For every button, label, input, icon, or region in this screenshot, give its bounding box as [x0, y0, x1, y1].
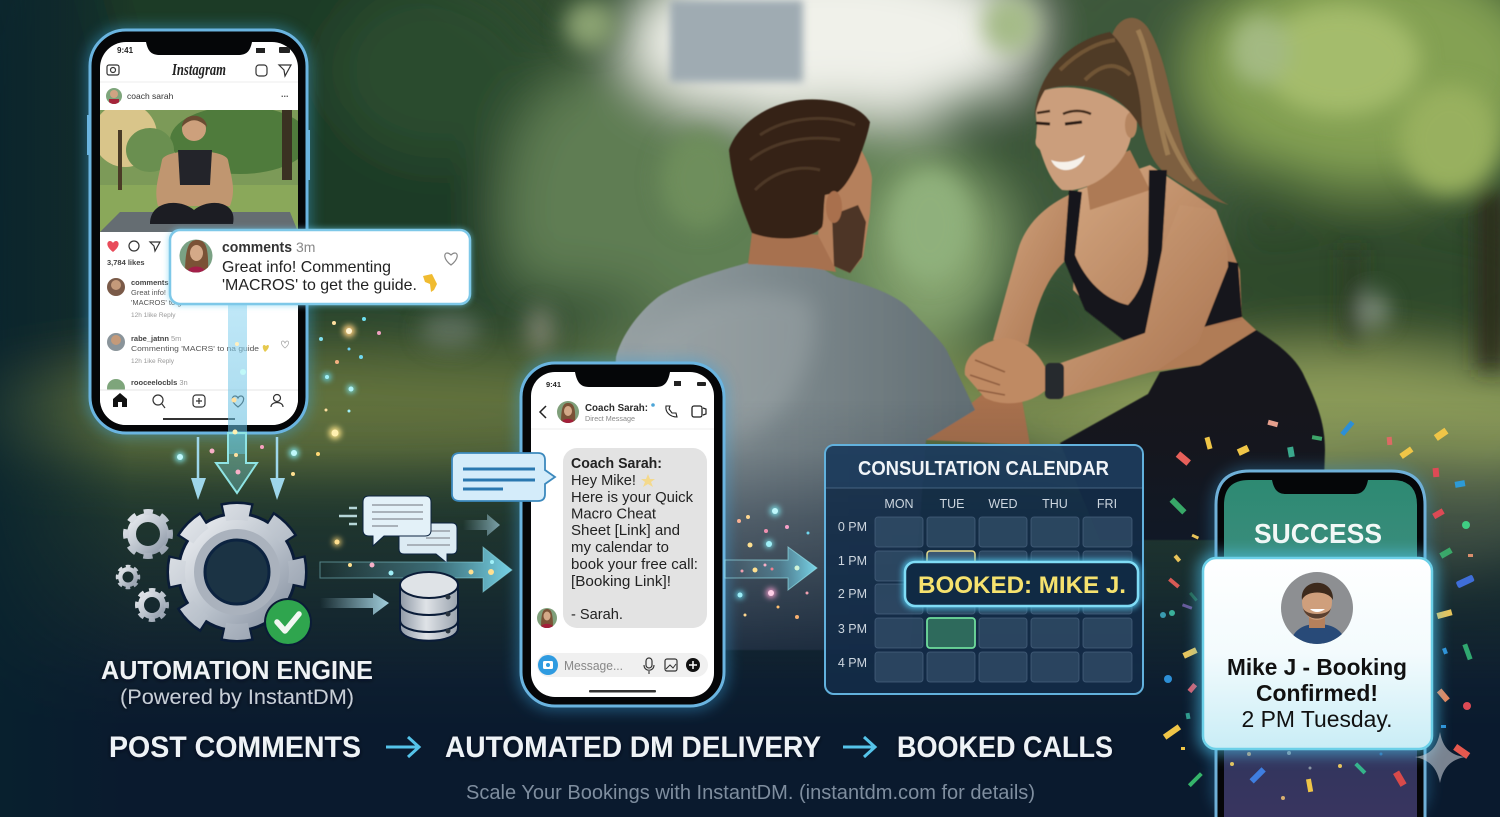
message bubble: Sheet [Link] and: [571, 523, 680, 539]
arrow: [386, 737, 419, 757]
navy gradient overlay at the bottom: [0, 400, 1500, 817]
time labels: 1 PM: [838, 554, 867, 568]
comment list: [107, 278, 289, 397]
callout: comment card: Great info! Commenting: [222, 259, 391, 276]
comment list: 12h 1ike Reply: [131, 358, 175, 365]
comment list: 'MACROS' to g: [131, 298, 181, 307]
status bar: 9:41: [117, 46, 134, 55]
confirmation text: [1227, 654, 1407, 732]
callout: blue message bubble: [452, 453, 555, 501]
step: booked calls: BOOKED CALLS: [897, 731, 1113, 764]
green slot: [927, 618, 975, 648]
icon: green check badge: [264, 598, 312, 646]
icon: database: [400, 572, 458, 641]
woman's hair cap: [1035, 32, 1142, 130]
heading: automation engine: (Powered by InstantDM): [120, 686, 354, 709]
message bubble: - Sarah.: [571, 607, 623, 623]
icon: small gears: [118, 512, 170, 620]
likes count: 3,784 likes: [107, 258, 145, 267]
status bar: [117, 47, 290, 53]
day labels: TUE: [940, 497, 964, 511]
man's neck: [748, 232, 836, 272]
comment list: comments: [131, 278, 169, 287]
phone: direct message: [516, 358, 729, 711]
highlighted slot: [927, 551, 975, 581]
like, comment, send icons: [107, 241, 160, 252]
status bar: 9:41: [546, 380, 561, 389]
time labels: 3 PM: [838, 622, 867, 636]
step: automated DM delivery: AUTOMATED DM DELIVERY: [445, 731, 821, 764]
arrow: main flow to DM phone: [320, 547, 512, 592]
message bubble: Coach Sarah:: [571, 456, 662, 472]
photo: woman coach: [965, 18, 1325, 540]
icon: pointing-down hand: [423, 274, 437, 292]
small avatar: [537, 608, 557, 629]
DM header: Direct Message: [585, 414, 635, 423]
reels and send icons: [256, 65, 291, 76]
notch: [575, 372, 670, 387]
flow headline: [109, 731, 1113, 764]
confetti: [1160, 420, 1475, 800]
woman's face: [1035, 87, 1132, 190]
profile row: [100, 82, 298, 105]
phone: success: [1211, 466, 1430, 817]
chat bubble icons: [339, 496, 457, 563]
icon: sparkle: [1415, 732, 1465, 783]
callout: comment card: comments: [222, 240, 292, 256]
woman's torso: [1073, 165, 1242, 345]
comment list: rooceelocbls 3n: [131, 378, 188, 387]
woman's neck: [1085, 150, 1150, 210]
woman's arm right: [1058, 205, 1228, 398]
calendar header: [826, 446, 1142, 488]
message bubble: my calendar to: [571, 540, 669, 556]
confirmation text: Confirmed!: [1256, 680, 1378, 706]
Instagram post photo: [100, 110, 298, 232]
woman's sports bra: [1064, 170, 1242, 346]
icon: heart outline: [445, 253, 457, 265]
step: post comments: POST COMMENTS: [109, 731, 361, 764]
comment list: rabe_jatnn 5m: [131, 334, 181, 343]
status bar: [546, 380, 706, 389]
message bubble: Here is your Quick: [571, 490, 694, 506]
camera icon: [107, 65, 119, 75]
calendar cells: [875, 517, 1132, 682]
arrows into the automation engine: [191, 437, 285, 500]
DM header: [531, 401, 714, 429]
left vignette: [0, 0, 130, 817]
icon: main gear: [177, 512, 312, 646]
day labels: THU: [1042, 497, 1068, 511]
profile row: coach sarah: [127, 91, 174, 101]
commenter avatar: [179, 239, 213, 274]
time labels: [838, 520, 867, 670]
DM header: Coach Sarah:: [585, 402, 648, 414]
clasped hands: [965, 338, 1050, 403]
message bubble: [563, 448, 707, 628]
arrow: to calendar: [725, 547, 817, 590]
comment list: Great info!: [131, 288, 166, 297]
time labels: 4 PM: [838, 656, 867, 670]
comment list: Commenting 'MACRS' to na guide: [131, 344, 259, 353]
woman's ponytail: [1112, 18, 1229, 205]
message input bar: [537, 653, 708, 692]
day labels: FRI: [1097, 497, 1117, 511]
comment list: 12h 1like Reply: [131, 312, 176, 319]
profile row: ...: [281, 89, 289, 99]
message input bar: Message...: [564, 659, 623, 673]
footer note: Scale Your Bookings with InstantDM. (instantdm.com for details): [466, 782, 1035, 804]
glowing particles: [175, 317, 810, 619]
phone: Instagram post: [86, 26, 311, 437]
day labels: WED: [988, 497, 1018, 511]
message bubble: Hey Mike!: [571, 473, 636, 489]
heading: automation engine: [101, 655, 373, 709]
calendar header: CONSULTATION CALENDAR: [858, 458, 1110, 480]
message bubble: Macro Cheat: [571, 506, 656, 522]
day labels: MON: [884, 497, 914, 511]
callout: booked label: [902, 559, 1141, 609]
time labels: 2 PM: [838, 587, 867, 601]
callout: comment card: 'MACROS' to get the guide.: [222, 277, 417, 294]
notch: [146, 42, 252, 55]
confirmation text: 2 PM Tuesday.: [1242, 706, 1392, 732]
man's arm: [926, 393, 1030, 445]
callout: booked label: BOOKED: MIKE J.: [918, 572, 1126, 599]
message bubble: book your free call:: [571, 557, 698, 573]
message bubble: [Booking Link]!: [571, 574, 671, 590]
man's hair: [729, 99, 870, 239]
callout: comment card: [168, 228, 472, 306]
panel: consultation calendar: [825, 445, 1143, 694]
day labels: [884, 497, 1117, 511]
avatar: Mike: [1281, 572, 1353, 646]
man's ear: [826, 191, 842, 223]
success heading: SUCCESS: [1254, 518, 1382, 549]
arrow: small grey to phone: [463, 514, 500, 536]
woman's midriff: [1125, 317, 1256, 372]
heading: automation engine: AUTOMATION ENGINE: [101, 655, 373, 685]
woman's arm left: [993, 193, 1073, 345]
man's shirt: [610, 263, 975, 650]
panel: booking confirmation card: [1197, 552, 1438, 755]
woman's leggings: [1060, 330, 1325, 540]
Instagram wordmark: Instagram: [171, 60, 226, 79]
icon: star: [641, 474, 655, 487]
smart watch: [1045, 363, 1064, 399]
bottom navigation bar: [100, 390, 298, 425]
arrow: to database: [320, 593, 389, 615]
man's face: [818, 140, 872, 273]
time labels: 0 PM: [838, 520, 867, 534]
arrow: [843, 737, 875, 757]
photo: man seen from behind: [610, 99, 1030, 650]
callout: comment card: 3m: [296, 239, 315, 255]
light beam from comments to the engine: [216, 304, 257, 493]
confirmation text: Mike J - Booking: [1227, 654, 1407, 680]
notch: [1272, 480, 1368, 494]
